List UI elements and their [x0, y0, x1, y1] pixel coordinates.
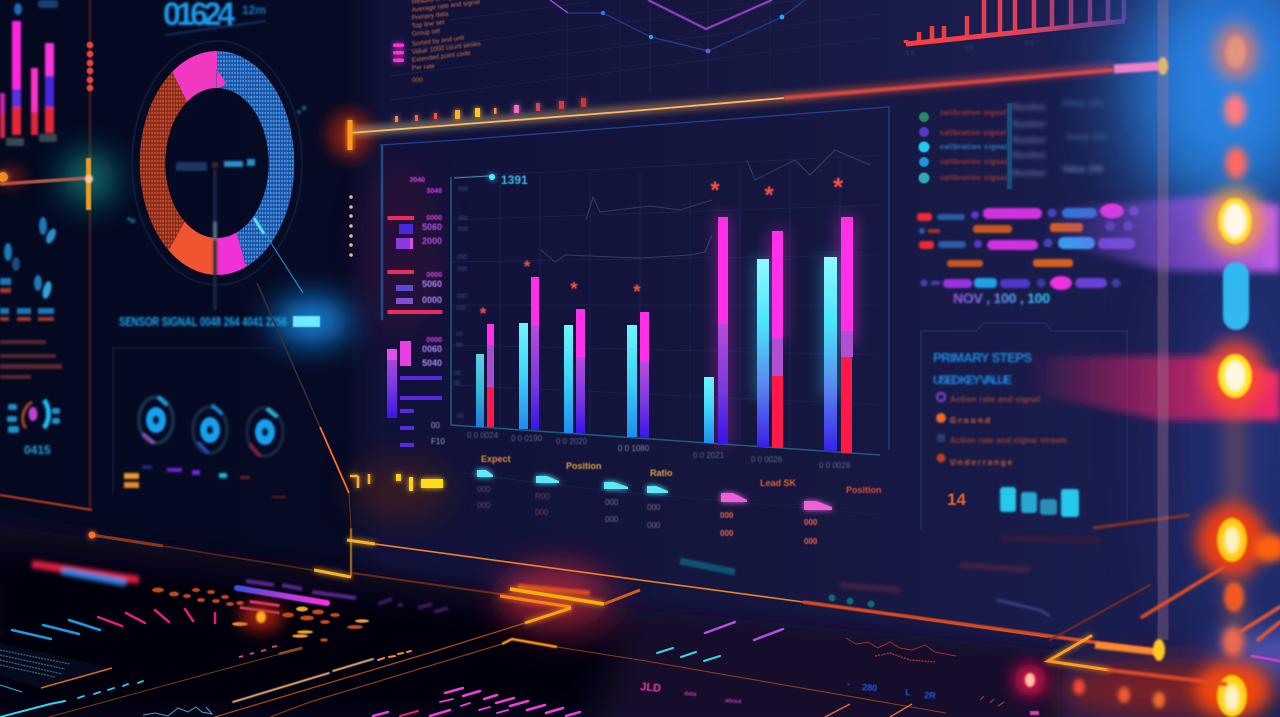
y axis labels: 00 — [456, 343, 463, 349]
summary rows: 000 — [477, 485, 491, 494]
primary steps card: Action rate and signal — [950, 395, 1040, 404]
status text: calibration signal — [940, 110, 1006, 117]
top right red spike chart: 0 0 — [965, 46, 974, 52]
summary rows: 000 — [647, 521, 661, 530]
blue label text — [847, 679, 937, 701]
status text: calibration signal — [940, 159, 1007, 166]
gauge legend — [124, 465, 286, 498]
line chart: magenta — [648, 0, 772, 29]
x axis labels: 0 0 0024 — [467, 431, 499, 440]
x axis labels: 0 0 0026 — [751, 455, 783, 464]
bottom centre console — [640, 538, 1100, 717]
gauge 2 — [193, 405, 227, 453]
summary rows: 000 — [720, 529, 734, 538]
left legend: 00 — [431, 421, 440, 430]
big counter: 12m — [242, 3, 266, 17]
cyan status strip: SENSOR SIGNAL 0048 264 4041 2256 — [119, 314, 287, 329]
left legend: 0000 — [426, 272, 442, 279]
lower peak bracket — [270, 639, 946, 717]
summary rows: 000 — [477, 501, 491, 510]
top text list: Top line set — [411, 19, 445, 30]
grid — [451, 155, 880, 450]
signal beads — [395, 98, 586, 122]
column headings: Expect — [481, 454, 511, 464]
left legend: 0000 — [426, 337, 442, 344]
left paragraph — [0, 340, 62, 379]
cyan ticks — [657, 648, 720, 661]
summary rows: 000 — [804, 537, 818, 546]
violet band — [1040, 196, 1280, 272]
left panel lines — [0, 495, 92, 510]
orange dot field — [152, 588, 369, 642]
summary rows: 000 — [605, 498, 619, 507]
y axis labels: 00 — [454, 381, 461, 387]
main horizontal neon line — [349, 57, 1168, 257]
left legend: 0000 — [426, 215, 442, 222]
y axis labels: 00 — [454, 371, 461, 377]
y axis labels: 000 — [457, 294, 468, 300]
left column panel — [0, 0, 115, 510]
left legend: 3040 — [409, 177, 425, 184]
glowing right column — [1014, 0, 1280, 717]
orange dashes — [239, 646, 302, 657]
summary rows — [460, 470, 880, 546]
pink label text: JLD — [640, 681, 662, 695]
top text list: Primary data — [411, 11, 449, 22]
chart axes — [451, 173, 880, 455]
blue label text: - — [847, 679, 850, 689]
primary steps card: Action rate and signal stream — [950, 436, 1067, 445]
donut ring — [152, 70, 282, 256]
bar group 1 — [476, 324, 494, 427]
donut chart — [127, 41, 306, 310]
y axis labels: 000 — [458, 187, 469, 193]
date value: NOV , 100 , 100 — [953, 290, 1050, 306]
pink label text — [640, 681, 742, 705]
fan dashes — [12, 609, 215, 639]
purple dashes — [705, 622, 783, 640]
blurred purple pills — [246, 581, 448, 612]
top text list: Value 1000 count series — [411, 41, 482, 56]
top right red spike chart — [906, 0, 1125, 57]
chart grid — [390, 0, 880, 100]
left legend — [387, 177, 445, 447]
primary steps card: PRIMARY STEPS — [933, 350, 1032, 365]
bar group 6 — [755, 230, 785, 448]
x axis labels: 0 0 0190 — [511, 434, 543, 443]
blue label text: 2R — [924, 690, 937, 701]
lower gold bracket — [501, 571, 640, 619]
blurred status values: Number — [1012, 168, 1047, 178]
pink label text: about — [725, 698, 742, 705]
top chart panel — [390, 0, 1125, 100]
bottom right lamps — [1014, 664, 1165, 708]
bar peak markers: * — [833, 172, 844, 202]
summary rows: 000 — [535, 508, 549, 517]
line chart: blue — [568, 0, 805, 53]
bottom stubs — [825, 704, 912, 717]
chart axes: 1391 — [501, 173, 528, 187]
small radial widget — [7, 400, 60, 457]
status text — [940, 110, 1007, 182]
mini device panel — [0, 643, 112, 692]
x axis labels: 0 0 2020 — [556, 437, 588, 446]
big counter — [163, 0, 266, 35]
peach neon segments — [49, 648, 411, 717]
lower frame lines — [88, 493, 1158, 717]
left legend: 0060 — [422, 344, 442, 354]
top text list: 000 — [412, 77, 423, 84]
status text: calibration signal — [940, 175, 1007, 182]
count and mini bars: 14 — [947, 490, 966, 509]
orbs — [1194, 24, 1280, 717]
blue label text: 280 — [862, 682, 878, 693]
pink band — [1025, 356, 1280, 420]
left legend: 0000 — [422, 295, 442, 305]
right info panel — [917, 98, 1190, 530]
pill rows — [917, 204, 1139, 290]
orange hot spot — [239, 603, 283, 631]
pink label text: data — [684, 691, 697, 698]
column headings: Position — [846, 485, 882, 495]
bar peak markers: * — [710, 177, 720, 204]
y axis labels: 000 — [457, 255, 468, 261]
bar group 7 — [822, 216, 856, 453]
cyan dashes — [0, 681, 143, 717]
y axis labels — [454, 187, 469, 420]
bar group 2 — [519, 277, 539, 430]
x axis labels — [467, 431, 851, 470]
left legend: 5060 — [422, 222, 442, 232]
bar group 4 — [627, 312, 649, 438]
blurred status values: Number — [1012, 119, 1047, 129]
primary steps card: Underrange — [950, 458, 1013, 467]
left legend: 5040 — [422, 358, 442, 368]
connecting rail — [1223, 400, 1247, 640]
small blue dials — [0, 217, 58, 321]
blurred status values: Value 100 — [1066, 132, 1107, 142]
bar peak markers: * — [524, 257, 531, 276]
translucent vertical strip — [1158, 0, 1168, 640]
teal glow node — [0, 152, 115, 210]
vertical divider — [88, 0, 92, 510]
bar peak markers: * — [764, 182, 774, 209]
top right red spike chart: 1 0 — [906, 51, 915, 57]
left legend: 2000 — [422, 236, 442, 246]
top right red spike chart: 0 0 — [1025, 41, 1034, 47]
diagonal edge — [257, 283, 349, 493]
faint trend lines — [541, 150, 870, 262]
blue label text: L — [905, 687, 912, 697]
yellow tick strip — [350, 474, 443, 491]
gauge panel — [113, 283, 349, 498]
main chart panel — [350, 107, 889, 546]
summary rows: 000 — [804, 518, 818, 527]
bar group 3 — [564, 309, 585, 433]
magenta gradient bar — [237, 588, 327, 603]
left legend: F10 — [431, 437, 445, 446]
cyan status strip — [119, 299, 350, 343]
left bar chart — [0, 0, 58, 146]
primary steps card: USED KEY VALUE — [933, 373, 1012, 387]
summary rows: 000 — [647, 503, 661, 512]
red waveform — [846, 638, 956, 662]
line chart: magenta left segment — [550, 0, 568, 13]
y axis labels: 00 — [457, 414, 464, 420]
magenta list markers — [393, 44, 404, 62]
bottom right connectors — [1048, 567, 1280, 684]
primary steps card: Ground — [950, 416, 990, 425]
column headings: Position — [566, 461, 602, 471]
blurred red and blue pill — [32, 564, 139, 583]
gauge 3 — [247, 408, 283, 456]
column headings: Lead SK — [760, 478, 797, 488]
top text list: Extended point code — [411, 50, 471, 64]
summary rows: 000 — [720, 511, 734, 520]
column headings — [481, 454, 882, 495]
left legend: 5060 — [422, 279, 442, 289]
blurred status values: Value 100 — [1062, 164, 1103, 174]
summary rows: R00 — [535, 492, 550, 501]
primary steps card — [921, 323, 1127, 530]
count and mini bars — [947, 487, 1190, 528]
blurred status values: Number — [1012, 150, 1047, 160]
x axis labels: 0 0 0026 — [819, 461, 851, 470]
bottom left console — [0, 564, 580, 717]
x axis labels: 0 0 1080 — [618, 444, 650, 453]
left legend: 3040 — [426, 188, 442, 195]
blurred status values: Number — [1012, 102, 1047, 112]
blurred status values: Value 100 — [1062, 98, 1103, 108]
top text list: Sorted by and unit — [411, 35, 465, 48]
gauge 1 — [139, 397, 173, 443]
panel frame — [380, 107, 889, 450]
status text: calibration signal — [940, 130, 1006, 137]
top text list — [411, 0, 482, 84]
red dots — [87, 42, 93, 91]
top text list: Per rate — [412, 63, 436, 72]
bar peak markers: * — [480, 304, 487, 323]
donut centre label — [176, 159, 255, 310]
blurred status values — [1012, 98, 1107, 178]
y axis labels: 000 — [456, 306, 467, 312]
sparkline — [143, 707, 212, 716]
y axis labels: 00 — [456, 332, 463, 338]
y axis labels: 000 — [457, 267, 468, 273]
y axis labels: 000 — [458, 216, 469, 222]
y axis labels: 000 — [458, 227, 469, 233]
magenta dash grid — [373, 688, 580, 716]
column headings: Ratio — [650, 468, 673, 478]
top text list: Group set — [411, 28, 441, 38]
small radial widget: 0415 — [24, 443, 51, 457]
status dots — [918, 112, 930, 184]
peach dot column — [349, 195, 353, 257]
x axis labels: 0 0 2021 — [693, 451, 725, 460]
bar group 5 — [704, 215, 730, 445]
status text: calibration signal — [940, 144, 1007, 151]
summary rows: 000 — [605, 515, 619, 524]
bar peak markers: * — [570, 279, 578, 299]
bar peak markers: * — [633, 282, 641, 303]
bar peak markers — [480, 172, 844, 323]
blurred status values: Number — [1012, 135, 1047, 145]
